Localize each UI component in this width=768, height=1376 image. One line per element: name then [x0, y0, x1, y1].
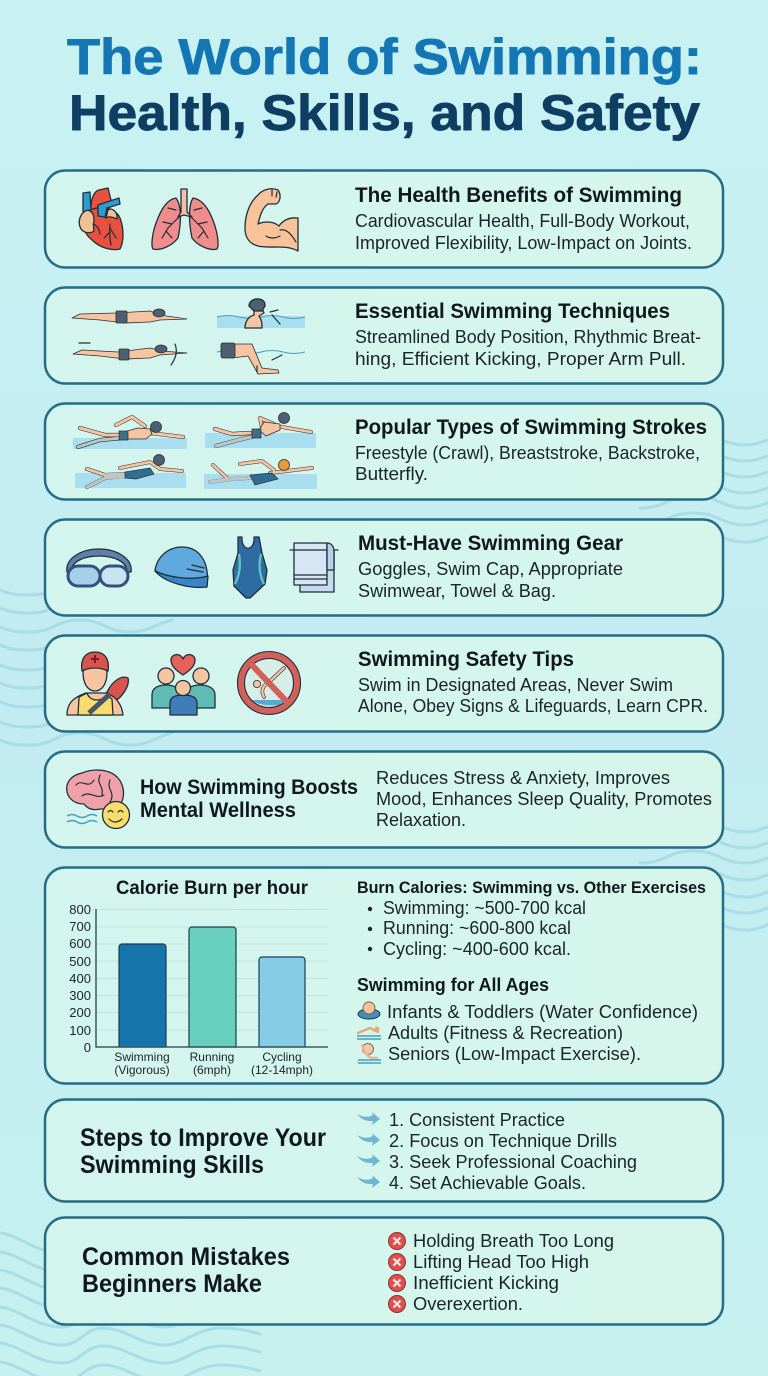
heading + text: Streamlined Body Position, Rhythmic Breat-: [355, 327, 701, 347]
heading: How Swimming Boosts: [140, 775, 358, 799]
panel: mistakes: [45, 1218, 723, 1324]
bar chart: 600: [69, 936, 91, 951]
bar chart: Running: [190, 1050, 234, 1064]
bar chart: (Vigorous): [114, 1063, 170, 1077]
icon: buddy group: [152, 655, 215, 715]
text block: [376, 768, 712, 830]
icon: swimsuit: [233, 537, 267, 598]
heading + text: Butterfly.: [355, 464, 428, 484]
bar chart: (6mph): [193, 1063, 231, 1077]
text block: all ages: [357, 974, 698, 1064]
text block: all ages: Adults (Fitness & Recreation): [388, 1023, 623, 1043]
icon: flexed arm: [245, 189, 298, 251]
heading: [140, 775, 358, 822]
heading: Mental Wellness: [140, 798, 296, 822]
heading + text: [355, 300, 701, 369]
arrows list: 2. Focus on Technique Drills: [389, 1131, 617, 1151]
icon: infant in float: [358, 1002, 380, 1019]
heading: Beginners Make: [82, 1270, 262, 1298]
arrows list: 3. Seek Professional Coaching: [389, 1152, 637, 1172]
icon: no diving sign: [238, 652, 300, 714]
mistakes list: Overexertion.: [413, 1294, 523, 1314]
bar chart: [69, 878, 328, 1077]
arrows list: [357, 1110, 637, 1193]
text block: Relaxation.: [376, 810, 466, 830]
bar chart: 200: [69, 1005, 91, 1020]
heading + text: Swimming Safety Tips: [358, 648, 574, 671]
text block: burn calories: Burn Calories: Swimming vs. Other Exercises: [357, 878, 706, 897]
bar chart: 0: [84, 1040, 91, 1055]
panel: calories and ages: [45, 868, 723, 1084]
heading: [82, 1243, 290, 1298]
bar chart: 100: [69, 1023, 91, 1038]
heading + text: Improved Flexibility, Low-Impact on Joints.: [355, 233, 692, 253]
text block: burn calories: [357, 878, 706, 959]
heading + text: Goggles, Swim Cap, Appropriate: [358, 559, 623, 579]
text block: burn calories: Running: ~600-800 kcal: [383, 918, 571, 938]
mistakes list: [388, 1231, 614, 1314]
mistakes list: Holding Breath Too Long: [413, 1231, 614, 1251]
heading + text: Cardiovascular Health, Full-Body Workout,: [355, 211, 690, 231]
title: The World of Swimming:: [67, 29, 702, 85]
icon: towel: [290, 543, 338, 592]
icon: brain and smile: [67, 770, 130, 828]
text block: all ages: Infants & Toddlers (Water Confidence): [387, 1002, 698, 1022]
heading + text: Swim in Designated Areas, Never Swim: [358, 675, 673, 695]
arrows list: 4. Set Achievable Goals.: [389, 1173, 586, 1193]
heading: [80, 1124, 326, 1179]
heading + text: [355, 184, 692, 253]
heading: Steps to Improve Your: [80, 1124, 326, 1152]
mistakes list: Inefficient Kicking: [413, 1273, 559, 1293]
heading + text: Alone, Obey Signs & Lifeguards, Learn CPR.: [358, 696, 708, 716]
icon: senior swimmer: [358, 1044, 381, 1063]
bar chart: Cycling: [262, 1050, 302, 1064]
bar chart: 700: [69, 919, 91, 934]
icon: technique figures: [72, 299, 305, 374]
text block: Reduces Stress & Anxiety, Improves: [376, 768, 670, 788]
heading + text: Freestyle (Crawl), Breaststroke, Backstroke,: [355, 443, 700, 463]
title: [67, 29, 702, 141]
panel: mental wellness: [45, 752, 723, 848]
panel: gear: [45, 520, 723, 616]
heading + text: Must-Have Swimming Gear: [358, 532, 623, 555]
heading + text: [358, 648, 708, 716]
icon: lungs: [152, 189, 218, 249]
bar chart: Swimming: [114, 1050, 170, 1064]
text block: all ages: Swimming for All Ages: [357, 974, 549, 995]
heading + text: The Health Benefits of Swimming: [355, 184, 682, 207]
bar chart: (12-14mph): [251, 1063, 313, 1077]
mistakes list: Lifting Head Too High: [413, 1252, 589, 1272]
text block: burn calories: Cycling: ~400-600 kcal.: [383, 939, 571, 959]
icon: heart: [79, 188, 123, 250]
bar chart: 500: [69, 954, 91, 969]
heading + text: Essential Swimming Techniques: [355, 300, 670, 323]
icon: lifeguard: [67, 652, 128, 715]
panel: safety: [45, 636, 723, 732]
bar chart: Calorie Burn per hour: [116, 878, 309, 899]
bar chart: 400: [69, 971, 91, 986]
heading + text: Swimwear, Towel & Bag.: [358, 581, 556, 601]
bar chart: 800: [69, 902, 91, 917]
panel: strokes: [45, 404, 723, 500]
text block: Mood, Enhances Sleep Quality, Promotes: [376, 789, 712, 809]
heading: Common Mistakes: [82, 1243, 290, 1271]
heading + text: [358, 532, 623, 601]
arrows list: 1. Consistent Practice: [389, 1110, 565, 1130]
heading + text: hing, Efficient Kicking, Proper Arm Pull.: [355, 349, 686, 369]
text block: burn calories: Swimming: ~500-700 kcal: [383, 898, 586, 918]
panel: steps: [45, 1100, 723, 1202]
icon: stroke figures: [73, 412, 317, 489]
icon: adult swimmer: [357, 1026, 381, 1039]
title: Health, Skills, and Safety: [69, 85, 700, 141]
heading + text: [355, 416, 707, 484]
panel: techniques: [45, 288, 723, 384]
bar chart: 300: [69, 988, 91, 1003]
icon: swim cap: [155, 547, 208, 587]
panel: health benefits: [45, 170, 723, 268]
icon: goggles: [67, 549, 131, 586]
heading + text: Popular Types of Swimming Strokes: [355, 416, 707, 439]
heading: Swimming Skills: [80, 1151, 264, 1179]
text block: all ages: Seniors (Low-Impact Exercise).: [388, 1044, 641, 1064]
